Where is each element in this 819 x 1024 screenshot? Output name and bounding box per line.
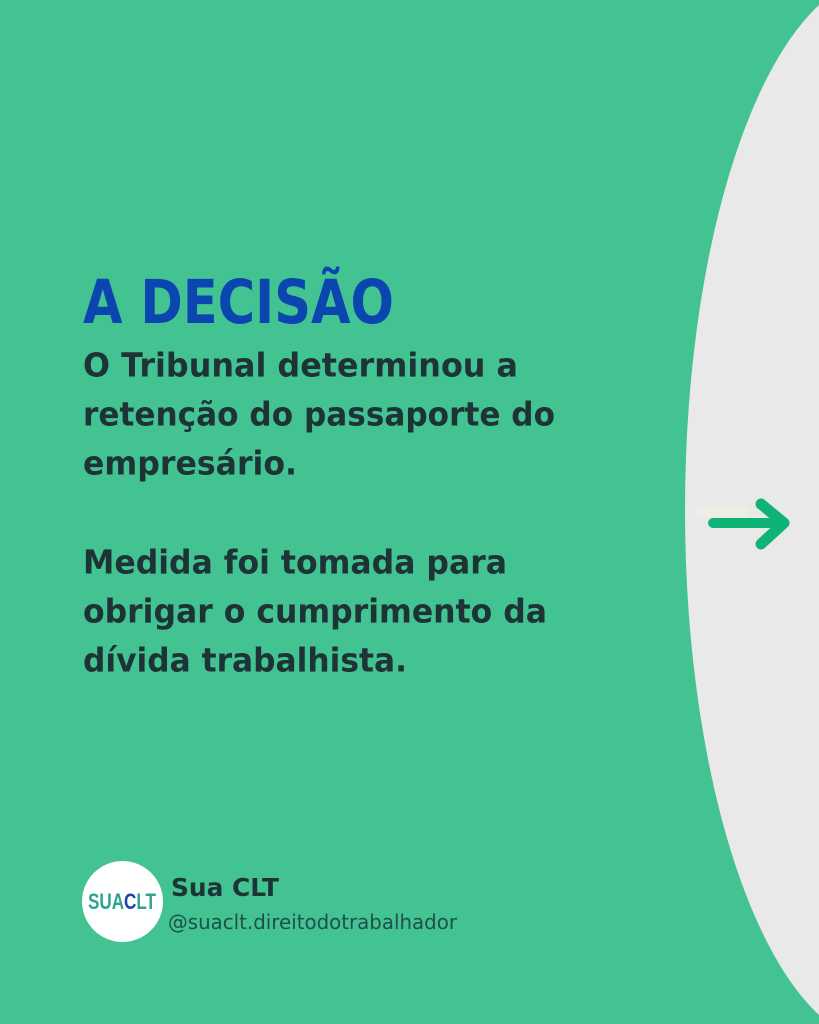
title: A DECISÃO xyxy=(83,266,394,338)
logo: Sua CLT circle xyxy=(82,861,163,942)
text block: second paragraph: dívida trabalhista. xyxy=(83,642,407,680)
text block: second paragraph: obrigar o cumprimento da xyxy=(83,592,547,630)
text block: first paragraph: retenção do passaporte do xyxy=(83,396,555,434)
text block: first paragraph: empresário. xyxy=(83,444,297,482)
text block: second paragraph: Medida foi tomada para xyxy=(83,544,507,582)
social handle: @suaclt.direitodotrabalhador xyxy=(168,910,458,934)
text block: first paragraph: O Tribunal determinou a xyxy=(83,346,518,384)
icon: next arrow xyxy=(700,504,784,544)
text block: second paragraph xyxy=(83,544,547,680)
logo: Sua CLT circle: SUACLT xyxy=(88,889,156,914)
brand name: Sua CLT xyxy=(171,873,279,902)
panel: grey curved side shape xyxy=(685,0,819,1024)
text block: first paragraph xyxy=(83,346,555,482)
